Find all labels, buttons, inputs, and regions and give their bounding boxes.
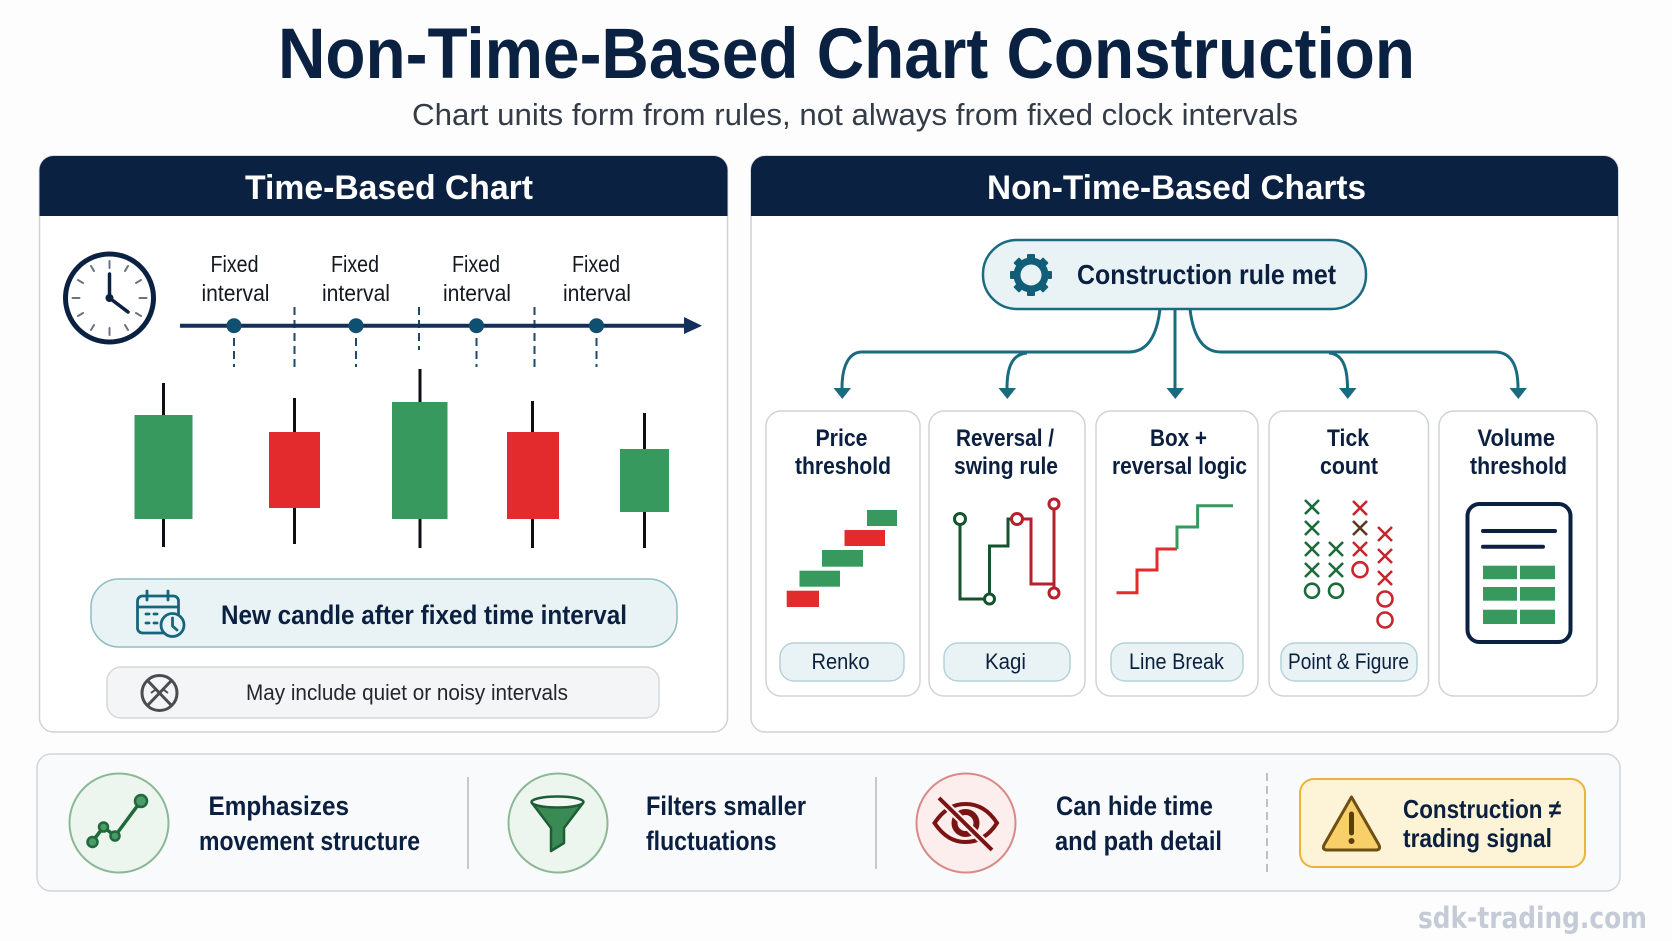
timeline with fixed intervals: interval xyxy=(443,280,511,306)
timeline with fixed intervals: interval xyxy=(563,280,631,306)
icon: clock xyxy=(66,254,154,342)
card: renko: Price xyxy=(816,425,868,452)
timeline with fixed intervals: Fixed xyxy=(331,251,379,277)
panel: time-based chart xyxy=(40,156,728,732)
card: kagi: swing rule xyxy=(954,453,1058,480)
card: point and figure: count xyxy=(1320,453,1378,480)
card: point and figure: Point & Figure xyxy=(1288,649,1409,674)
heading: non-time-based charts: Non-Time-Based Charts xyxy=(987,169,1366,207)
rule pill: construction rule met xyxy=(983,240,1366,309)
chart: renko bricks xyxy=(787,510,897,607)
timeline with fixed intervals xyxy=(180,251,702,367)
card: volume threshold xyxy=(1439,411,1597,696)
chart: kagi lines xyxy=(954,499,1059,604)
icon: calendar clock xyxy=(138,591,184,636)
card: point and figure xyxy=(1269,411,1428,696)
text: emphasizes movement structure: Emphasizes xyxy=(208,791,349,821)
text: filters smaller fluctuations xyxy=(646,791,806,856)
card: kagi: Kagi xyxy=(985,649,1026,674)
heading: time-based chart: Time-Based Chart xyxy=(245,169,533,207)
icon: gear xyxy=(1010,254,1052,296)
chart: volume bars xyxy=(1468,504,1570,642)
card: line break xyxy=(1096,411,1258,696)
text: emphasizes movement structure: movement structure xyxy=(199,826,420,856)
text: can hide time and path detail: and path detail xyxy=(1055,826,1222,856)
card: volume threshold: threshold xyxy=(1470,453,1567,480)
arrows: rule to chart types xyxy=(834,309,1527,399)
icon: movement line chart xyxy=(70,774,168,872)
card: point and figure: Tick xyxy=(1327,425,1370,452)
card: renko xyxy=(766,411,920,696)
text: can hide time and path detail: Can hide time xyxy=(1056,791,1213,821)
icon: crossed circle xyxy=(142,676,177,710)
callout: construction not trading signal: Construction ≠ xyxy=(1403,794,1561,824)
panel: non-time-based charts xyxy=(751,156,1618,732)
timeline with fixed intervals: interval xyxy=(322,280,390,306)
chart: line break steps xyxy=(1116,506,1233,593)
timeline with fixed intervals: interval xyxy=(202,280,270,306)
note: quiet or noisy intervals xyxy=(107,667,659,718)
callout: new candle xyxy=(91,579,677,647)
text: filters smaller fluctuations: fluctuations xyxy=(646,826,776,856)
timeline with fixed intervals: Fixed xyxy=(572,251,620,277)
card: line break: Line Break xyxy=(1129,649,1225,674)
card: volume threshold: Volume xyxy=(1478,425,1555,452)
subtitle: Chart units form from rules, not always from fixed clock intervals xyxy=(412,97,1298,132)
card: renko: threshold xyxy=(795,453,891,480)
panel: bottom takeaways xyxy=(37,754,1620,891)
icon: warning triangle xyxy=(1323,797,1380,850)
timeline with fixed intervals: Fixed xyxy=(210,251,258,277)
note: quiet or noisy intervals: May include quiet or noisy intervals xyxy=(246,680,568,705)
card: line break: reversal logic xyxy=(1112,453,1247,480)
chart: x and o columns xyxy=(1305,500,1392,628)
text: filters smaller fluctuations: Filters smaller xyxy=(646,791,806,821)
card: kagi: Reversal / xyxy=(956,425,1054,452)
rule pill: construction rule met: Construction rule met xyxy=(1077,259,1336,290)
timeline with fixed intervals: Fixed xyxy=(452,251,500,277)
card: line break: Box + xyxy=(1150,425,1207,452)
title: Non-Time-Based Chart Construction xyxy=(278,15,1415,94)
card: renko: Renko xyxy=(812,649,870,674)
card: kagi xyxy=(929,411,1085,696)
text: emphasizes movement structure xyxy=(199,791,420,856)
text: can hide time and path detail xyxy=(1055,791,1222,856)
callout: new candle: New candle after fixed time interval xyxy=(221,600,627,630)
callout: construction not trading signal: trading signal xyxy=(1403,823,1552,853)
icon: hidden eye xyxy=(916,774,1016,872)
icon: funnel xyxy=(508,774,608,872)
callout: construction not trading signal xyxy=(1300,779,1585,867)
candlestick chart xyxy=(134,369,669,548)
